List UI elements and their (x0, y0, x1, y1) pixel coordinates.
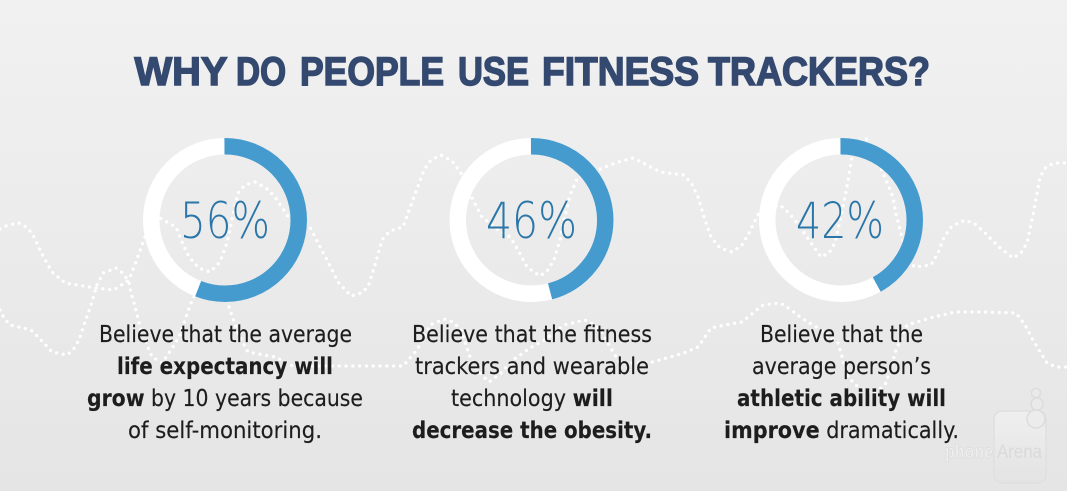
title: FITNESS (542, 50, 699, 94)
title: USE (458, 50, 529, 94)
stat 3 description: Believe that the (760, 322, 923, 348)
stat 3 description: average person’s (752, 354, 931, 380)
stat 3 description (724, 322, 959, 444)
stat 3 description: improve dramatically. (724, 418, 959, 444)
stat 1 description: life expectancy will (117, 354, 333, 380)
title: TRACKERS? (708, 50, 930, 94)
stat 1: 56% donut: 56% (180, 192, 270, 250)
watermark: PhoneArena logo (945, 388, 1046, 483)
stat 2 description: technology will (451, 386, 613, 412)
stat 2 description: decrease the obesity. (412, 418, 652, 444)
stat 1: 56% donut (151, 146, 299, 294)
stat 3 description: athletic ability will (737, 386, 946, 412)
stat 1 description (87, 322, 363, 444)
title: PEOPLE (300, 50, 444, 94)
stat 3: 42% donut: 42% (796, 192, 884, 250)
stat 3: 42% donut (767, 146, 915, 294)
watermark: PhoneArena logo: Arena (997, 442, 1042, 463)
stat 2: 46% donut (458, 146, 605, 294)
stat 2 description: Believe that the fitness (412, 322, 652, 348)
stat 1 description: of self-monitoring. (128, 418, 322, 444)
title (134, 50, 930, 94)
dotted activity lines (0, 138, 1067, 393)
stat 2 description (412, 322, 652, 444)
title: WHY (134, 50, 228, 94)
stat 1 description: grow by 10 years because (87, 386, 363, 412)
watermark: PhoneArena logo: phone (945, 442, 993, 463)
stat 2 description: trackers and wearable (415, 354, 649, 380)
title: DO (236, 50, 286, 94)
stat 1 description: Believe that the average (99, 322, 352, 348)
stat 2: 46% donut: 46% (486, 192, 577, 250)
